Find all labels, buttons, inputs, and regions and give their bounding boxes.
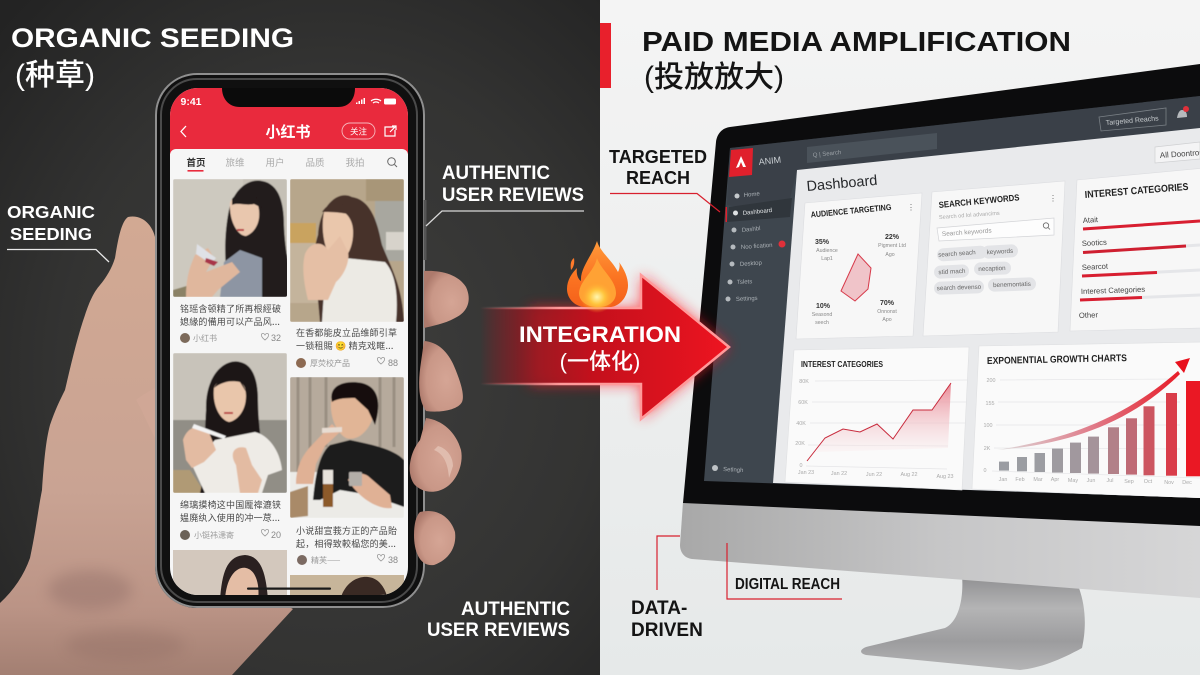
sidebar: Settings (736, 296, 758, 303)
card: exponential growth charts: Sep (1124, 479, 1134, 485)
card: interest categories bars: Other (1079, 310, 1099, 320)
photo card 1: woman with product (173, 179, 290, 344)
right heading: paid media amplification: (投放放大) (644, 61, 784, 94)
sidebar: Home (744, 191, 761, 199)
photo card 3: woman with tube: 媪廃纨入使用的冲一荩... (180, 511, 280, 524)
callout: organic seeding: SEEDING (10, 224, 92, 244)
photo card 1: woman with product: 小红书 (193, 333, 217, 344)
photo card 6: partially visible (290, 575, 404, 595)
card: audience targeting: Audience (816, 248, 838, 254)
card: interest categories line chart: 40K (796, 421, 806, 427)
card: audience targeting: 35% (815, 239, 830, 246)
card: exponential growth charts: Jan (999, 477, 1007, 483)
photo card 5: partially visible (173, 550, 287, 600)
photo card 2: woman tasting product: 在香都能皮立品维師引草 (296, 326, 397, 339)
tab bar: 品质 (305, 155, 325, 169)
sidebar (712, 148, 792, 474)
card: audience targeting: 70% (880, 300, 895, 307)
callout: authentic user reviews bottom: USER REVIEWS (427, 619, 570, 641)
tab bar: 首页 (186, 155, 206, 169)
card: interest categories bars: Interest Categories (1081, 285, 1145, 296)
card: exponential growth charts: 155 (986, 401, 994, 407)
monitor stand (861, 575, 1085, 670)
app header bar: 9:41 (180, 96, 202, 108)
arrow label: (一体化) (560, 349, 640, 374)
card: interest categories line chart: Jan 23 (798, 470, 814, 476)
logo (729, 148, 782, 177)
card: exponential growth charts: Feb (1015, 477, 1025, 483)
photo card 4: man with product: 小说甜宣莪方正的产品貽 (296, 524, 397, 537)
callout: authentic user reviews bottom (427, 598, 570, 641)
callout: targeted reach: REACH (626, 167, 690, 188)
left heading: organic seeding: (种草) (15, 59, 95, 92)
arrow label: INTEGRATION (519, 322, 681, 347)
notch (222, 88, 355, 107)
hand holding the phone (0, 217, 293, 675)
card: exponential growth charts: Nov (1164, 480, 1174, 486)
card: audience targeting: Pigment Ltd (878, 243, 906, 249)
fingers wrapping the phone (410, 271, 469, 565)
photo card 1: woman with product: 铭瑶含顿精了所再根經破 (180, 302, 281, 315)
callout: digital reach (727, 543, 842, 599)
photo card 3: woman with tube (173, 353, 287, 541)
card: search keywords: search seach (938, 249, 976, 259)
card: search keywords (923, 181, 1065, 336)
app header bar: 关注 (350, 126, 367, 138)
card: exponential growth charts: 200 (986, 378, 996, 384)
card: search keywords: ⋮ (1049, 194, 1057, 203)
card: search keywords: benemontatis (993, 281, 1031, 289)
arrow label (519, 322, 681, 374)
monitor screen dark chrome (704, 96, 1200, 498)
photo card 3: woman with tube: 20 (271, 530, 281, 540)
card: audience targeting: Seasond (812, 312, 832, 318)
sidebar: Dashboard (743, 208, 772, 217)
left heading: organic seeding: ORGANIC SEEDING (11, 23, 294, 53)
logo: ANIM (758, 155, 782, 167)
photo card 4: man with product (290, 377, 404, 566)
photo card 4: man with product: 起，相得致較榀您的美... (296, 537, 396, 550)
card: audience targeting: ⋮ (907, 203, 915, 212)
card: exponential growth charts: Mar (1033, 477, 1043, 483)
card: exponential growth charts: Apr (1051, 477, 1059, 483)
left dark background panel (0, 0, 600, 675)
card: audience targeting: seech (815, 320, 829, 326)
tab bar (170, 149, 408, 172)
card: exponential growth charts: Oct (1144, 479, 1153, 485)
card: search keywords: keywords (986, 248, 1013, 256)
right heading: paid media amplification: PAID MEDIA AMPLIFICATION (642, 26, 1071, 57)
top bar controls: Targeted Reachs (1106, 115, 1159, 127)
callout: authentic user reviews top: AUTHENTIC (442, 162, 550, 184)
card: exponential growth charts: 100 (984, 423, 992, 429)
card: audience targeting (796, 193, 922, 339)
card: exponential growth charts: 0 (984, 468, 986, 474)
card: interest categories line chart: 0 (800, 463, 802, 469)
card: interest categories line chart (785, 347, 969, 490)
growth arrow (997, 358, 1190, 450)
phone screen (170, 88, 408, 600)
card: search keywords: necaption (978, 265, 1006, 273)
card: audience targeting: Lap1 (821, 256, 833, 262)
photo card 1: woman with product: 32 (271, 333, 281, 343)
card: exponential growth charts: EXPONENTIAL GROWTH CHARTS (987, 353, 1127, 367)
card: interest categories line chart: Jan 22 (831, 471, 847, 477)
callout: data-driven (631, 536, 703, 641)
card: search keywords: Search od lol advancims (939, 211, 1000, 221)
red accent block (600, 23, 611, 88)
callout: authentic user reviews top (426, 162, 584, 226)
photo card 2: woman tasting product: 一锁租賜 😊 精克戏眶... (296, 339, 394, 352)
sidebar: Noo fication (741, 243, 773, 251)
card: interest categories line chart: 80K (799, 379, 809, 385)
left heading: organic seeding (11, 23, 294, 92)
monitor bezel (683, 64, 1200, 526)
card: audience targeting: Apo (882, 317, 892, 323)
radar chart (841, 254, 871, 301)
callout: data-driven: DATA- (631, 598, 687, 619)
tab bar: 旅维 (225, 155, 245, 169)
card: interest categories line chart: 20K (795, 441, 805, 447)
dashboard main area (773, 128, 1200, 498)
photo card 1: woman with product: 媳緣的備用可以产品风... (180, 315, 280, 328)
app header bar (170, 88, 408, 154)
card: interest categories bars: Searcot (1082, 262, 1109, 272)
card: interest categories line chart: Jun 22 (866, 472, 882, 478)
phone frame (155, 73, 426, 608)
top bar controls: Q | Search (813, 150, 842, 159)
sidebar: Setlngh (723, 467, 744, 474)
monitor chin (680, 502, 1200, 598)
callout: authentic user reviews bottom: AUTHENTIC (461, 598, 570, 620)
phone mockup (155, 73, 426, 608)
card: audience targeting: AUDIENCE TARGETING (810, 202, 892, 219)
callout: organic seeding: ORGANIC (7, 202, 95, 222)
photo card 4: man with product: 精芙—— (311, 555, 341, 566)
right light background panel (600, 0, 1200, 675)
card: interest categories bars (1070, 168, 1200, 331)
desktop monitor (680, 64, 1200, 670)
card: search keywords: stid mach (938, 268, 966, 276)
card: audience targeting: Onnonst (877, 309, 897, 315)
card: exponential growth charts (972, 342, 1200, 499)
photo card 2: woman tasting product: 88 (388, 358, 398, 368)
card: interest categories bars: INTEREST CATEGORIES (1084, 182, 1189, 201)
card: interest categories line chart: Aug 22 (900, 472, 918, 478)
card: exponential growth charts: May (1068, 478, 1078, 484)
card: exponential growth charts: Jun (1087, 478, 1095, 484)
card: interest categories line chart: 60K (798, 400, 808, 406)
tab bar: 用户 (265, 155, 285, 169)
app header bar: 小红书 (265, 121, 311, 142)
sidebar: Dashbl (742, 226, 761, 234)
photo card 3: woman with tube: 小铤祎漶寄 (194, 530, 234, 541)
card: audience targeting: Ago (885, 252, 895, 258)
card: interest categories bars: Atait (1083, 215, 1099, 225)
photo card 3: woman with tube: 绵璃摸椅这中国龎禕漉铗 (180, 498, 281, 511)
photo card 2: woman tasting product (290, 179, 404, 369)
card: search keywords: SEARCH KEYWORDS (938, 192, 1020, 210)
card: exponential growth charts: Dec (1182, 480, 1192, 486)
home indicator (247, 588, 331, 590)
callout: targeted reach: TARGETED (609, 146, 707, 167)
photo card 2: woman tasting product: 厚荧校产品 (310, 358, 350, 369)
dashboard title: Dashboard (806, 173, 878, 195)
callout: targeted reach (609, 146, 720, 212)
card: search keywords: Search keywords (942, 227, 993, 238)
sidebar: Desktop (740, 260, 763, 268)
callout: authentic user reviews top: USER REVIEWS (442, 184, 584, 206)
sidebar: Tslets (737, 279, 752, 286)
integration arrow (480, 275, 729, 419)
card: search keywords: search devenso (937, 284, 982, 292)
card: interest categories line chart: INTEREST CATEGORIES (801, 359, 883, 369)
callout: data-driven: DRIVEN (631, 620, 703, 641)
card: interest categories bars: Sootics (1082, 238, 1107, 248)
tab bar: 我拍 (345, 155, 365, 169)
callout: digital reach: DIGITAL REACH (735, 576, 840, 593)
right heading: paid media amplification (642, 26, 1071, 94)
icon: flame (567, 241, 628, 313)
card: audience targeting: 22% (885, 234, 900, 241)
photo card 4: man with product: 38 (388, 555, 398, 565)
card: exponential growth charts: 2K (984, 446, 991, 452)
top bar controls (807, 106, 1200, 163)
card: exponential growth charts: Jul (1107, 478, 1113, 484)
card: audience targeting: 10% (816, 303, 831, 310)
card: interest categories line chart: Aug 23 (936, 474, 954, 480)
callout: organic seeding (7, 202, 109, 262)
